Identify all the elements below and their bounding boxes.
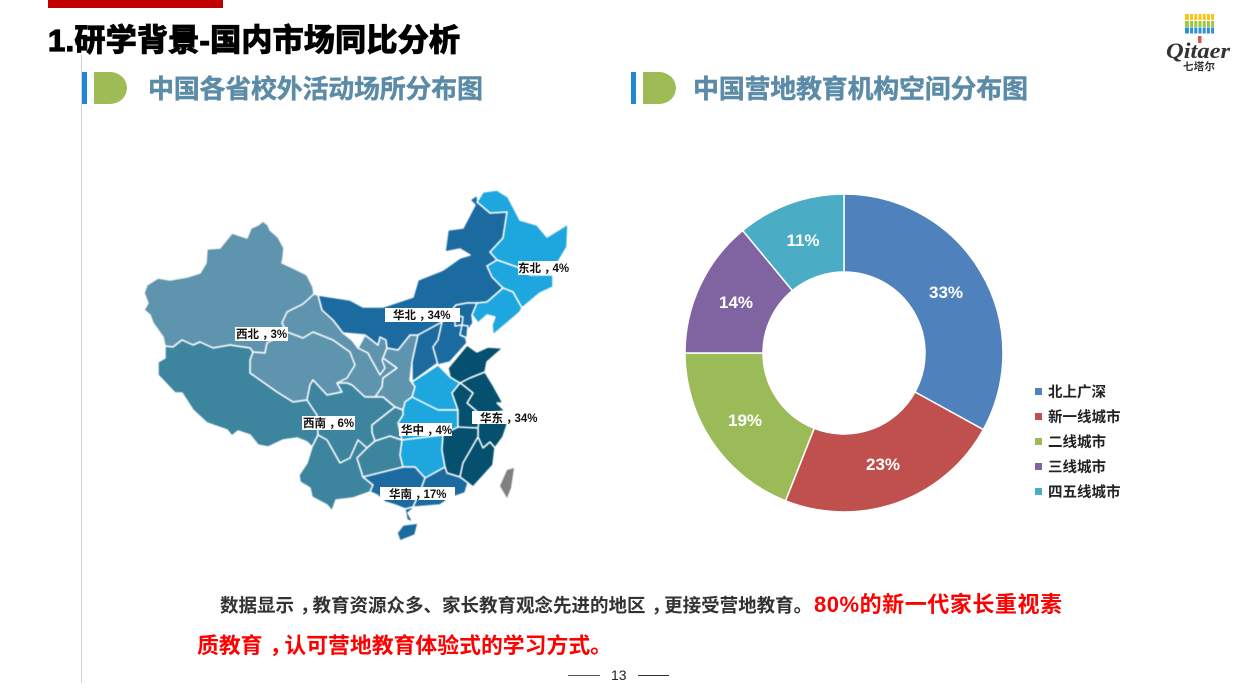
map label: south: 华南 ，17% [389, 487, 447, 501]
legend: 北上广深 [1048, 383, 1106, 401]
legend: 三线城市 [1048, 458, 1106, 476]
segment: 33% [844, 194, 1003, 430]
legend: 四五线城市 [1048, 483, 1120, 501]
map label: north: 华北 ，34% [393, 308, 451, 322]
conclusion text [197, 592, 1062, 658]
map label: northeast: 东北 ，4% [518, 261, 569, 275]
map label: south [380, 487, 455, 501]
region: northeast [472, 190, 568, 335]
region: central [398, 365, 460, 478]
segment: 19% [685, 353, 814, 501]
logo: Qitaer: 七塔尔 [1183, 60, 1216, 73]
heading: map section: 中国各省校外活动场所分布图 [148, 74, 483, 104]
red top bar [48, 0, 223, 8]
region: south [363, 467, 468, 541]
segment: 11% [743, 194, 844, 291]
map of China by region [144, 190, 568, 541]
map label: north [385, 308, 460, 322]
legend: 二线城市 [1048, 433, 1106, 451]
logo: Qitaer: Qitaer [1166, 38, 1230, 63]
map label: northwest: 西北 ，3% [236, 328, 287, 341]
region: southwest [158, 340, 403, 511]
donut value labels: 33% [929, 283, 963, 302]
map label: southwest: 西南 ，6% [303, 417, 354, 430]
map label: central: 华中 ，4% [401, 423, 452, 437]
conclusion text: 80%的新一代家长重视素 [814, 592, 1062, 617]
legend [1035, 383, 1120, 501]
page number: 13 [611, 667, 627, 683]
logo: Qitaer [1166, 14, 1230, 73]
region: northwest [144, 221, 418, 410]
donut value labels: 19% [728, 411, 762, 430]
map label: east: 华东 ，34% [480, 411, 538, 425]
title: 1.研学背景-国内市场同比分析 [48, 23, 460, 58]
region: east [442, 345, 507, 487]
heading: donut section: 中国营地教育机构空间分布图 [693, 74, 1028, 104]
conclusion text: 质教育 ，认可营地教育体验式的学习方式。 [197, 633, 612, 658]
segment: 14% [685, 230, 792, 353]
page number [568, 667, 669, 683]
region: north [318, 195, 507, 382]
donut value labels: 23% [866, 455, 900, 474]
donut value labels: 11% [786, 231, 820, 250]
donut value labels: 14% [719, 293, 753, 312]
left vertical rule [81, 55, 82, 683]
legend: 新一线城市 [1048, 408, 1120, 426]
region: Taiwan [500, 468, 514, 498]
conclusion text: 数据显示 ，教育资源众多、家长教育观念先进的地区 ，更接受营地教育。 [220, 595, 812, 616]
segment: 23% [786, 392, 983, 512]
donut value labels [719, 231, 963, 474]
donut chart [685, 194, 1003, 512]
